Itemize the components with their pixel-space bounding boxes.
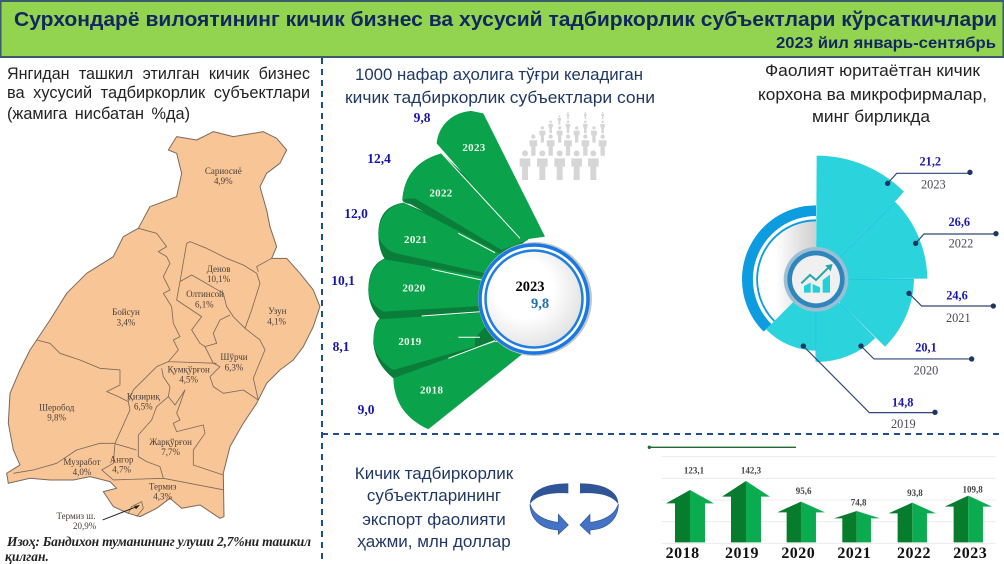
header banner	[0, 1, 1004, 57]
radial years: 2020	[914, 363, 938, 377]
export chart and cycle icon	[530, 446, 997, 562]
fan chart	[368, 111, 545, 429]
heading: entities per 1000 people	[345, 65, 655, 107]
arrow bars	[666, 481, 992, 542]
fan values: 9,0	[358, 402, 375, 417]
map labels: 4,0%	[73, 467, 92, 477]
arrow values: 142,3	[741, 466, 762, 476]
map: Surkhandarya districts	[7, 132, 320, 531]
heading: active small enterprises: корхона ва микрофирмалар,	[758, 86, 987, 104]
wedge 2020	[816, 279, 875, 362]
map labels: Сариосиё	[205, 166, 242, 176]
radial chart	[742, 155, 999, 431]
heading: export volume: ҳажми, млн доллар	[357, 532, 511, 551]
fan year labels	[398, 142, 486, 396]
fan year labels: 2019	[398, 336, 422, 348]
fan year labels: 2023	[462, 142, 486, 154]
map labels: Шўрчи	[220, 352, 248, 362]
map labels: 4,3%	[153, 492, 173, 502]
heading: export volume: субъектларининг	[367, 486, 501, 505]
note	[5, 534, 311, 564]
map labels: 6,3%	[225, 362, 244, 372]
note: қилган.	[5, 549, 49, 564]
arrow values: 95,6	[796, 486, 812, 496]
radial years: 2021	[946, 311, 971, 325]
fan year labels: 2020	[402, 282, 426, 294]
year axis labels: 2021	[837, 545, 871, 562]
heading: new small business entities: ва хусусий тадбиркорлик субъектлари	[7, 84, 310, 102]
radial years: 2022	[949, 237, 973, 251]
map labels: 3,4%	[117, 317, 136, 327]
radial years: 2023	[921, 177, 946, 191]
arrow values: 74,8	[851, 498, 867, 508]
year axis labels: 2023	[953, 545, 987, 562]
blade separators	[422, 153, 520, 358]
map labels: Олтинсой	[186, 289, 224, 299]
radial years: 2019	[891, 417, 916, 431]
blade 2020	[368, 258, 498, 319]
heading: entities per 1000 people: кичик тадбиркорлик субъектлари сони	[345, 88, 655, 107]
map labels: 4,1%	[267, 316, 287, 326]
map labels: Шеробод	[39, 402, 75, 412]
map labels: Қизириқ	[127, 392, 160, 402]
map labels: 4,7%	[112, 465, 132, 475]
heading: active small enterprises	[758, 62, 987, 126]
fan centre circle	[478, 242, 592, 356]
note: Изоҳ: Бандихон туманининг улуши 2,7%ни ташкил	[6, 534, 311, 549]
radial values: 26,6	[949, 215, 970, 229]
subtitle: 2023 йил январь-сентябрь	[776, 35, 996, 52]
map labels: Музработ	[63, 457, 101, 467]
map labels: Жарқўрғон	[149, 437, 192, 447]
fan values: 12,0	[344, 206, 368, 221]
heading: active small enterprises: Фаолият юритаётган кичик	[765, 62, 981, 80]
year axis labels: 2018	[666, 545, 700, 562]
heading: active small enterprises: минг бирликда	[812, 108, 931, 126]
leader lines	[803, 173, 996, 413]
radial years	[891, 177, 973, 431]
heading: new small business entities: Янгидан ташкил этилган кичик бизнес	[7, 65, 310, 83]
map labels: 10,1%	[207, 274, 231, 284]
year axis labels: 2022	[897, 545, 931, 562]
map labels	[39, 166, 287, 531]
year axis labels	[666, 545, 987, 562]
map labels: 4,9%	[214, 176, 233, 186]
map labels: Узун	[268, 306, 287, 316]
arrow values	[684, 466, 983, 508]
wedge 2022	[816, 202, 927, 279]
radial values: 24,6	[946, 288, 968, 302]
title: Сурхондарё вилоятининг кичик бизнес ва хусусий тадбиркорлик субъектлари кўрсаткичлари	[14, 9, 997, 31]
blade 2022	[402, 153, 532, 257]
heading: export volume	[355, 464, 514, 551]
blade 2021	[378, 203, 512, 278]
wedge 2019	[766, 279, 816, 351]
fan values: 10,1	[331, 273, 355, 288]
heading: export volume: Кичик тадбиркорлик	[355, 464, 514, 483]
blade 2023	[437, 111, 545, 240]
year axis labels: 2019	[725, 545, 759, 562]
heading: export volume: экспорт фаолияти	[362, 510, 506, 529]
arrow values: 93,8	[907, 488, 923, 498]
map labels: 6,5%	[134, 402, 153, 412]
fan year labels: 2018	[420, 384, 443, 396]
arrow values: 109,8	[963, 484, 983, 494]
map labels: 20,9%	[73, 521, 97, 531]
map labels: Ангор	[110, 455, 134, 465]
map labels: Термиз ш.	[57, 511, 95, 521]
icon: growth chart in centre	[784, 247, 848, 312]
fan year labels: 2021	[404, 234, 427, 246]
blue ring	[742, 205, 816, 332]
map labels: 6,1%	[195, 299, 214, 309]
map labels: Қумқўрғон	[167, 364, 210, 374]
map labels: 7,7%	[161, 447, 181, 457]
fan values: 12,4	[367, 151, 391, 166]
radial values: 20,1	[915, 341, 937, 355]
map labels: Денов	[207, 264, 231, 274]
radial values: 21,2	[920, 155, 941, 169]
heading: new small business entities	[7, 65, 310, 123]
fan values	[331, 110, 431, 417]
icon: circular arrows	[530, 483, 618, 534]
radial values	[892, 155, 970, 410]
icon: people crowd	[520, 112, 606, 180]
blade 2018	[393, 342, 532, 429]
blade 2019	[373, 312, 498, 378]
fan centre circle: 2023	[516, 279, 544, 295]
map labels: 4,5%	[179, 374, 199, 384]
radial values: 14,8	[892, 396, 913, 410]
fan year labels: 2022	[429, 188, 453, 200]
year axis labels: 2020	[781, 545, 815, 562]
wedge 2023	[816, 156, 904, 279]
fan values: 8,1	[333, 339, 350, 354]
fan centre circle: 9,8	[531, 296, 549, 312]
heading: entities per 1000 people: 1000 нафар аҳолига тўғри келадиган	[355, 65, 643, 84]
fan values: 9,8	[414, 110, 431, 125]
heading: new small business entities: (жамига нисбатан %да)	[7, 105, 190, 123]
wedge 2021	[816, 279, 914, 347]
map labels: Бойсун	[112, 307, 140, 317]
map labels: Термиз	[149, 482, 177, 492]
map labels: 9,8%	[47, 413, 67, 423]
arrow values: 123,1	[684, 466, 705, 476]
